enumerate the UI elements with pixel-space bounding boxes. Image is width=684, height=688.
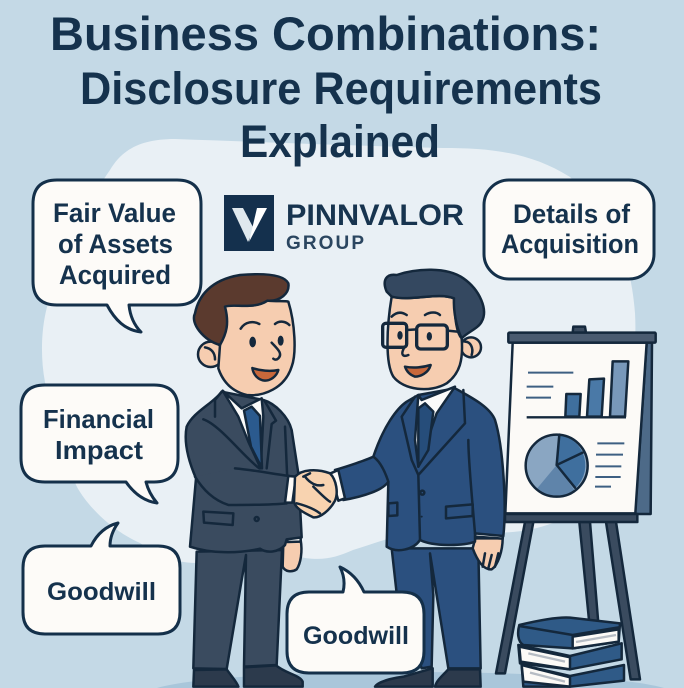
callout: Details of Acquisition	[484, 180, 654, 279]
title: Business Combinations:	[50, 7, 601, 60]
left man arm	[195, 468, 289, 505]
bar chart	[526, 361, 628, 417]
left man shirt and tie	[223, 391, 263, 468]
callout: Financial Impact	[21, 385, 178, 503]
figure: left businessman	[186, 274, 303, 687]
callout: Fair Value of Assets Acquired: Acquired	[59, 260, 171, 290]
title	[50, 7, 602, 167]
left man jacket	[186, 392, 302, 552]
callout: Goodwill (center): Goodwill	[303, 622, 409, 650]
logo: Pinnvalor Group: GROUP	[286, 233, 364, 254]
callout: Fair Value of Assets Acquired: Fair Value	[53, 198, 176, 228]
right man jacket	[335, 388, 505, 550]
logo: Pinnvalor Group	[224, 195, 464, 254]
easel legs	[496, 522, 640, 679]
callout: Goodwill (center)	[287, 567, 424, 673]
callout: Financial Impact: Financial	[43, 404, 154, 434]
right man trousers and shoes	[375, 532, 503, 687]
callout: Fair Value of Assets Acquired: of Assets	[58, 229, 173, 259]
title: Explained	[240, 116, 440, 167]
board	[635, 343, 652, 514]
callout: Goodwill (left)	[23, 523, 180, 634]
stack of books	[518, 618, 624, 687]
callout: Financial Impact: Impact	[55, 435, 143, 465]
right man head	[461, 337, 481, 357]
left man head	[198, 342, 223, 367]
right man shirt and tie	[415, 387, 455, 467]
handshake	[285, 470, 345, 517]
figure: right businessman	[285, 270, 505, 687]
easel with chart board	[496, 327, 656, 687]
pie chart	[526, 435, 624, 497]
callout: Fair Value of Assets Acquired	[33, 180, 201, 332]
title: Disclosure Requirements	[80, 63, 602, 114]
callout: Details of Acquisition: Details of	[513, 199, 631, 229]
left man trousers and shoes	[193, 535, 303, 687]
logo: Pinnvalor Group: PINNVALOR	[286, 199, 464, 232]
callout: Details of Acquisition: Acquisition	[501, 229, 639, 259]
callout: Goodwill (left): Goodwill	[47, 578, 156, 606]
